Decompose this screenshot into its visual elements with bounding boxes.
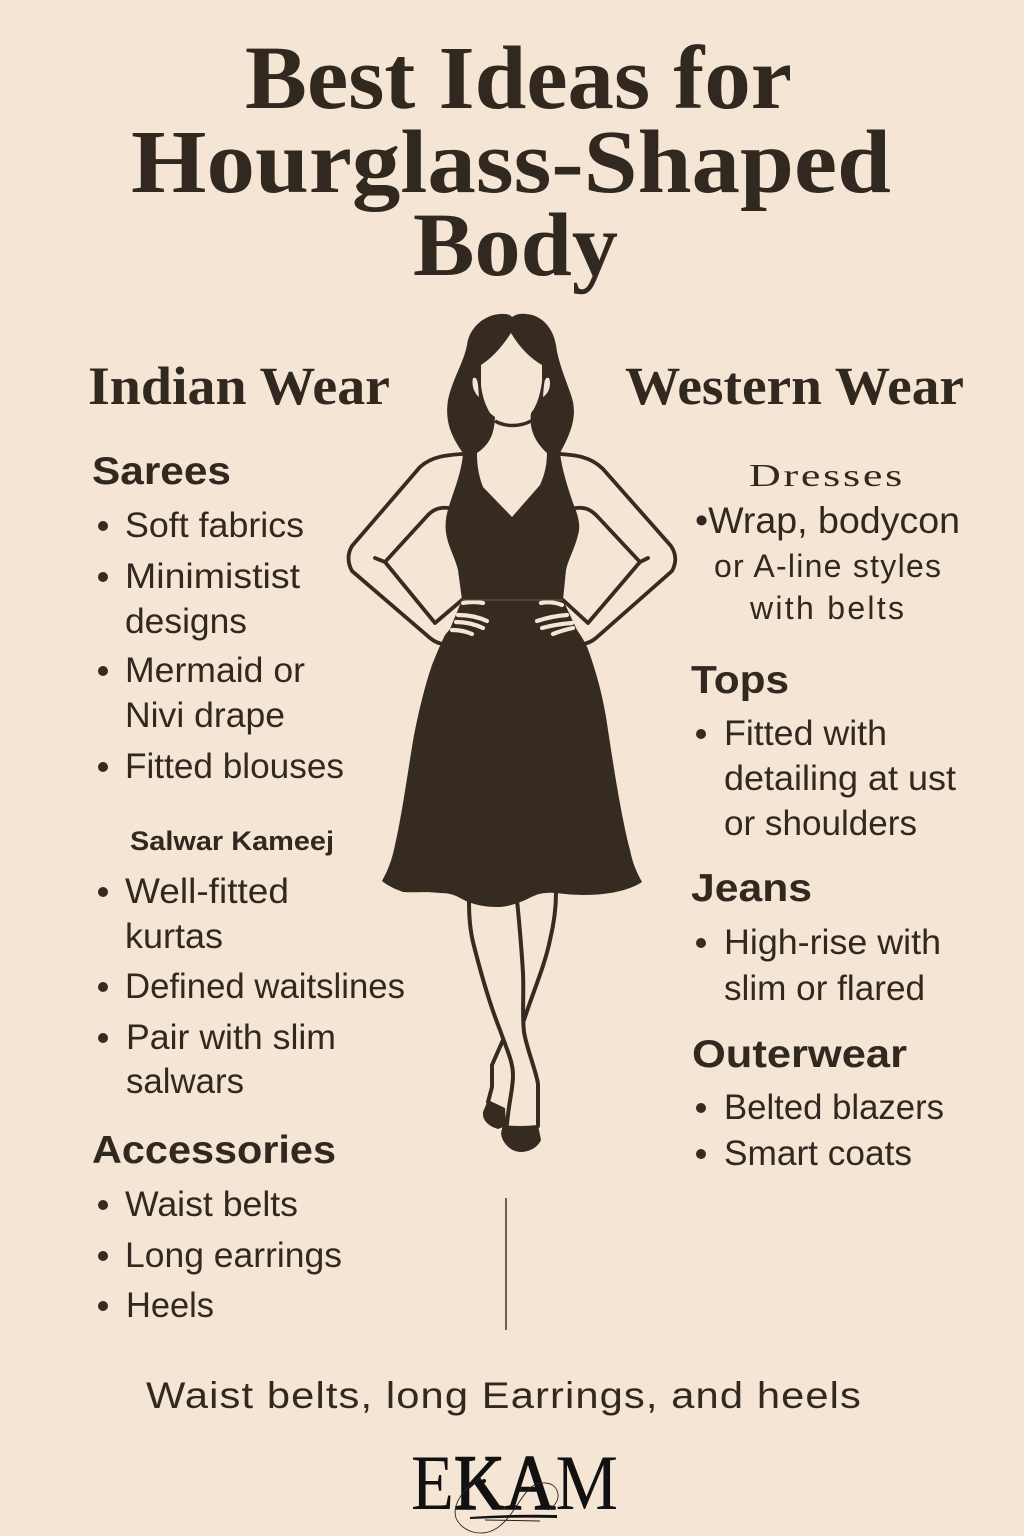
section: Accessories: Waist belts — [125, 1185, 298, 1224]
section: Sarees: designs — [125, 602, 247, 641]
section: Accessories: Heels — [126, 1286, 214, 1325]
title — [131, 29, 891, 295]
ears — [472, 378, 550, 397]
section: Sarees: Nivi drape — [125, 696, 285, 735]
section: Outerwear — [692, 1033, 944, 1173]
section: Outerwear: Outerwear — [692, 1033, 907, 1076]
section: Sarees: Soft fabrics — [125, 506, 304, 545]
waist seam — [462, 599, 563, 601]
dress — [382, 452, 642, 907]
section: Salwar Kameej: Defined waitslines — [125, 967, 405, 1006]
section: Jeans: Jeans — [691, 867, 812, 910]
section: Salwar Kameej: Pair with slim — [126, 1018, 336, 1057]
title: Best Ideas for — [245, 29, 792, 128]
section: Sarees: Mermaid or — [125, 651, 305, 690]
hair — [447, 314, 574, 453]
section: Dresses: with belts — [749, 590, 904, 626]
section: Sarees: Fitted blouses — [125, 747, 344, 786]
heading: Western Wear: Western Wear — [625, 356, 964, 416]
section: Sarees: Sarees — [92, 450, 231, 493]
section: Dresses: Dresses — [749, 457, 905, 493]
section: Accessories — [92, 1129, 342, 1325]
section: Outerwear: Belted blazers — [724, 1088, 944, 1127]
section: Tops: Tops — [691, 659, 789, 702]
section: Tops: detailing at ust — [724, 759, 956, 798]
section: Sarees: Minimistist — [125, 557, 300, 596]
section: Tops: or shoulders — [724, 804, 917, 843]
section: Jeans: slim or flared — [724, 969, 925, 1008]
section: Salwar Kameej — [98, 826, 405, 1101]
section: Salwar Kameej: Well-fitted — [125, 872, 289, 911]
section: Tops: Fitted with — [724, 714, 887, 753]
caption: Waist belts, long Earrings, and heels — [146, 1375, 862, 1416]
section: Salwar Kameej: Salwar Kameej — [130, 826, 334, 856]
panel: Indian Wear list — [92, 450, 405, 1325]
title: Hourglass-Shaped — [131, 113, 891, 212]
illustration: woman in black dress — [348, 314, 675, 1152]
panel: Western Wear list — [691, 457, 960, 1173]
section: Jeans: High-rise with — [724, 923, 941, 962]
section: Sarees — [92, 450, 344, 786]
section: Accessories: Accessories — [92, 1129, 336, 1172]
chin line — [495, 421, 531, 426]
section: Outerwear: Smart coats — [724, 1134, 912, 1173]
logo: EKAM: EKAM — [411, 1439, 618, 1526]
section: Dresses — [695, 457, 960, 626]
title: Body — [413, 196, 618, 295]
legs — [469, 893, 556, 1126]
section: Tops — [691, 659, 956, 843]
shoes — [483, 1100, 506, 1129]
arms — [348, 454, 675, 644]
section: Salwar Kameej: kurtas — [125, 917, 223, 956]
section: Salwar Kameej: salwars — [126, 1062, 244, 1101]
heading: Indian Wear: Indian Wear — [88, 356, 390, 416]
section: Dresses: •Wrap, bodycon — [695, 500, 960, 541]
hands — [452, 602, 573, 634]
section: Accessories: Long earrings — [125, 1236, 342, 1275]
face — [481, 333, 542, 422]
section: Dresses: or A-line styles — [714, 548, 941, 584]
section: Jeans — [691, 867, 941, 1008]
